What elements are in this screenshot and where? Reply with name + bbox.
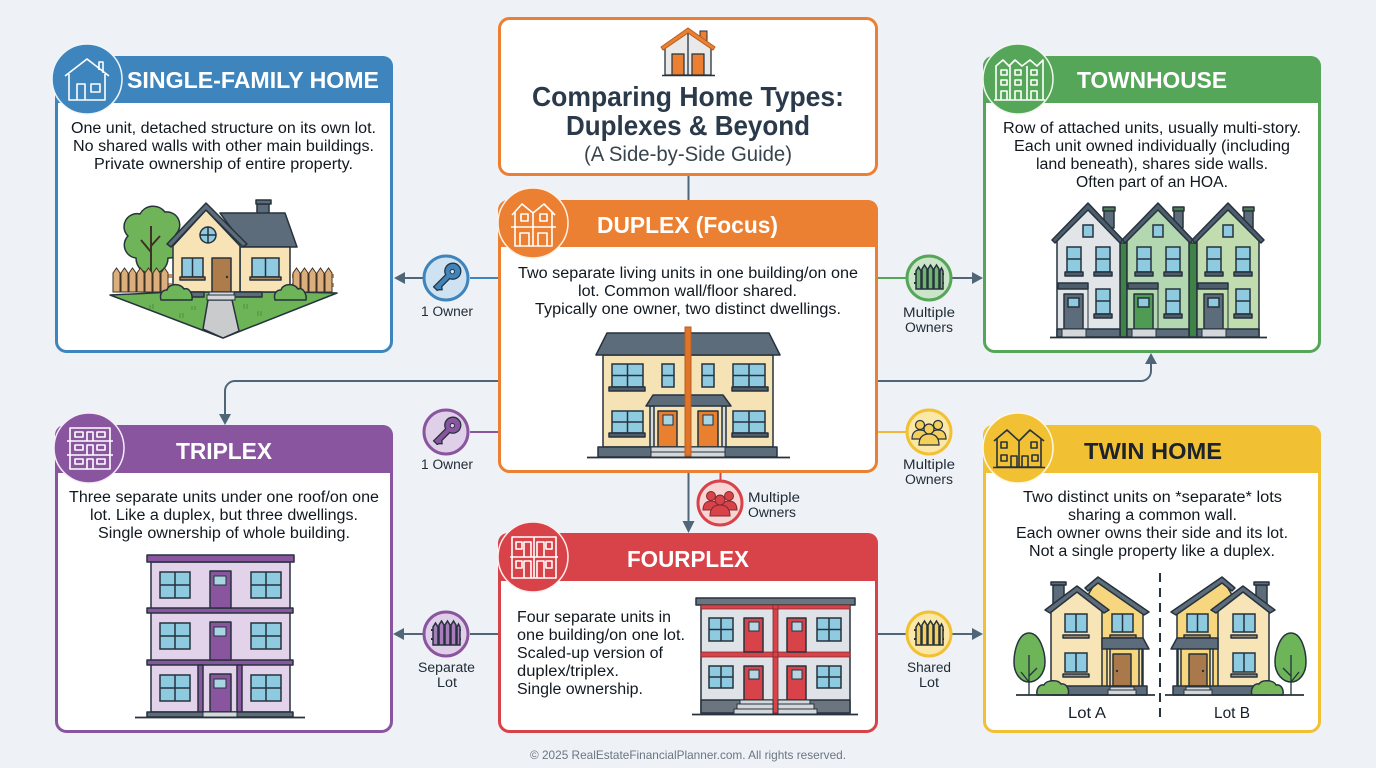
label: multiple owners bbox=[903, 457, 955, 487]
illustration: detached house bbox=[110, 200, 337, 338]
illustration: townhouse row bbox=[1050, 203, 1267, 338]
panel: single-family home bbox=[52, 44, 393, 352]
label: multiple owners bbox=[903, 305, 955, 335]
header band bbox=[55, 56, 393, 103]
description: Each owner owns their side and its lot. bbox=[1016, 525, 1288, 542]
description bbox=[69, 489, 379, 542]
description: sharing a common wall. bbox=[1068, 507, 1237, 524]
description: Single ownership. bbox=[517, 681, 643, 698]
label: separate lot: Separate bbox=[418, 660, 475, 675]
label: 1 owner: 1 Owner bbox=[421, 457, 474, 472]
label: 1 owner: 1 Owner bbox=[421, 304, 474, 319]
title heading bbox=[532, 81, 844, 141]
description: duplex/triplex. bbox=[517, 663, 619, 680]
description: Typically one owner, two distinct dwellings. bbox=[535, 301, 841, 318]
description: Not a single property like a duplex. bbox=[1029, 543, 1275, 560]
panel: triplex bbox=[54, 413, 393, 732]
label: multiple owners: Multiple bbox=[903, 457, 955, 472]
illustration: fourplex building bbox=[692, 598, 858, 714]
description: Scaled-up version of bbox=[517, 645, 664, 662]
label: multiple owners: Owners bbox=[905, 472, 953, 487]
description: Often part of an HOA. bbox=[1076, 174, 1228, 191]
header band bbox=[498, 200, 878, 247]
header band bbox=[498, 533, 878, 581]
connector: duplex to townhouse via multiple owners bbox=[878, 256, 983, 335]
title heading: Comparing Home Types: bbox=[532, 81, 844, 112]
subtitle: (A Side-by-Side Guide) bbox=[584, 143, 792, 166]
label: separate lot bbox=[418, 660, 475, 690]
connector: duplex to fourplex bbox=[682, 473, 694, 533]
connector: fourplex to twin home via shared lot bbox=[878, 612, 983, 690]
description: Single ownership of whole building. bbox=[98, 525, 350, 542]
description: Two separate living units in one building/on one bbox=[518, 265, 858, 282]
description: Four separate units in bbox=[517, 609, 671, 626]
panel: twin home bbox=[983, 413, 1321, 732]
label: shared lot: Lot bbox=[919, 675, 939, 690]
description: lot. Common wall/floor shared. bbox=[578, 283, 797, 300]
panel: fourplex bbox=[498, 522, 878, 732]
icon: people yellow bbox=[907, 410, 951, 454]
panel: duplex focus bbox=[498, 188, 878, 472]
header band bbox=[983, 425, 1321, 473]
illustration: triplex building bbox=[135, 555, 305, 718]
label: multiple owners: Multiple bbox=[903, 305, 955, 320]
description: land beneath), shares side walls. bbox=[1036, 156, 1268, 173]
description bbox=[1003, 120, 1301, 191]
heading: TRIPLEX bbox=[176, 438, 272, 464]
label: shared lot bbox=[907, 660, 951, 690]
label: multiple owners bbox=[748, 490, 800, 520]
connector: multiple owners red bbox=[698, 473, 800, 525]
description: Row of attached units, usually multi-story. bbox=[1003, 120, 1301, 137]
footer copyright: © 2025 RealEstateFinancialPlanner.com. All rights reserved. bbox=[530, 748, 846, 762]
icon: fence purple bbox=[424, 612, 468, 656]
icon badge: house bbox=[52, 44, 122, 114]
connector: duplex to triplex bbox=[219, 381, 498, 425]
heading: SINGLE-FAMILY HOME bbox=[127, 67, 379, 93]
icon badge: duplex bbox=[498, 188, 568, 258]
connector: multiple owners yellow bbox=[878, 410, 955, 487]
icon: duplex house bbox=[661, 28, 715, 76]
description bbox=[517, 609, 685, 698]
connector: fourplex to triplex via separate lot bbox=[393, 612, 498, 690]
header band bbox=[983, 56, 1321, 103]
heading: TWIN HOME bbox=[1084, 438, 1222, 464]
icon: key purple bbox=[424, 410, 468, 454]
label: multiple owners: Owners bbox=[748, 505, 796, 520]
connector: 1 owner purple bbox=[421, 410, 498, 472]
connector: title to duplex bbox=[688, 176, 690, 200]
illustration: lot B house bbox=[1165, 577, 1306, 695]
icon: fence yellow bbox=[907, 612, 951, 656]
description: Private ownership of entire property. bbox=[94, 156, 353, 173]
description: Three separate units under one roof/on one bbox=[69, 489, 379, 506]
label: separate lot: Lot bbox=[437, 675, 457, 690]
label: multiple owners: Multiple bbox=[748, 490, 800, 505]
icon badge: four units bbox=[498, 522, 568, 592]
header band bbox=[55, 425, 393, 473]
panel: townhouse bbox=[983, 44, 1321, 352]
icon: key blue bbox=[424, 256, 468, 300]
description: Each unit owned individually (including bbox=[1014, 138, 1290, 155]
label: multiple owners: Owners bbox=[905, 320, 953, 335]
description: No shared walls with other main buildings. bbox=[73, 138, 374, 155]
label: lot B: Lot B bbox=[1214, 705, 1250, 722]
icon: fence green bbox=[907, 256, 951, 300]
description bbox=[518, 265, 858, 318]
illustration: duplex building bbox=[587, 327, 790, 458]
title heading: Duplexes & Beyond bbox=[566, 110, 810, 141]
connector: duplex to townhouse bbox=[878, 353, 1157, 381]
heading: TOWNHOUSE bbox=[1077, 67, 1227, 93]
description bbox=[1016, 489, 1288, 560]
description: lot. Like a duplex, but three dwellings. bbox=[90, 507, 358, 524]
label: lot A: Lot A bbox=[1068, 705, 1107, 722]
lot divider bbox=[1159, 573, 1161, 718]
icon badge: twin house bbox=[983, 413, 1053, 483]
connector: duplex to single-family via 1 owner bbox=[394, 256, 498, 319]
description: Two distinct units on *separate* lots bbox=[1023, 489, 1282, 506]
icon: people red bbox=[698, 481, 742, 525]
description: one building/on one lot. bbox=[517, 627, 685, 644]
icon badge: row houses bbox=[983, 44, 1053, 114]
heading: FOURPLEX bbox=[627, 546, 749, 572]
heading: DUPLEX (Focus) bbox=[597, 212, 778, 238]
description bbox=[71, 120, 376, 173]
panel: title bbox=[500, 18, 876, 174]
illustration: lot A house bbox=[1014, 577, 1155, 695]
label: shared lot: Shared bbox=[907, 660, 951, 675]
icon badge: three-storey building bbox=[54, 413, 124, 483]
description: One unit, detached structure on its own lot. bbox=[71, 120, 376, 137]
